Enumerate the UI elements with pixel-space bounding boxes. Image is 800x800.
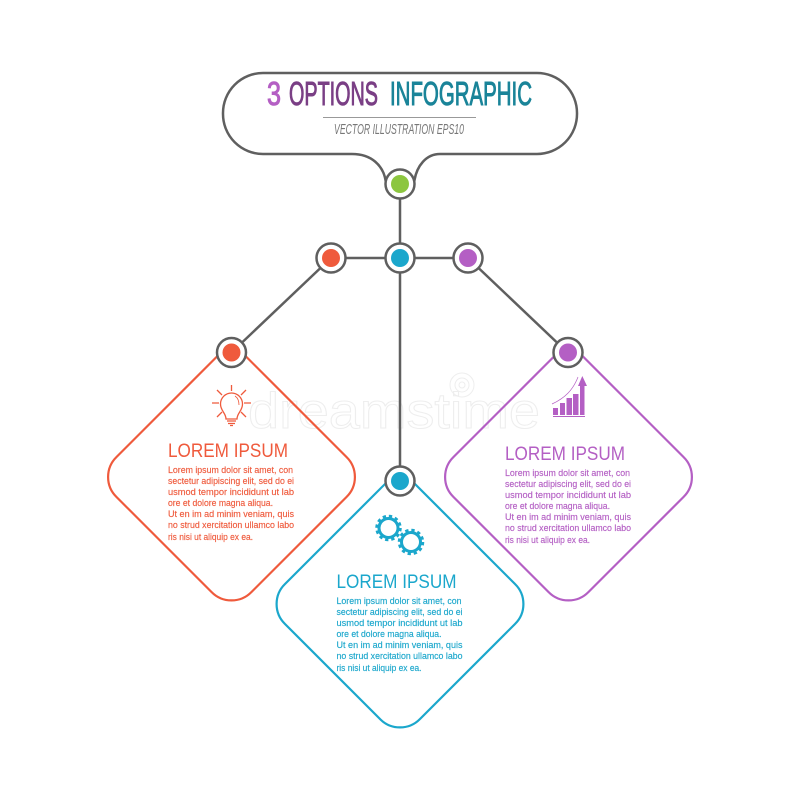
icon: light bulb bbox=[212, 385, 251, 426]
text block: blue: Ut en im ad minim veniam, quis bbox=[336, 639, 463, 650]
text block: blue: ris nisi ut aliquip ex ea. bbox=[336, 662, 422, 673]
node: purple panel bbox=[554, 338, 582, 367]
text block: red: ore et dolore magna aliqua. bbox=[168, 497, 273, 508]
icon: gears bbox=[377, 516, 422, 554]
title: OPTIONS bbox=[289, 75, 378, 112]
heading: red: LOREM IPSUM bbox=[168, 441, 288, 462]
text block: blue: Lorem ipsum dolor sit amet, con bbox=[336, 595, 462, 606]
subtitle: VECTOR ILLUSTRATION EPS10 bbox=[334, 121, 464, 138]
heading: blue: LOREM IPSUM bbox=[336, 572, 456, 593]
text block: purple: ore et dolore magna aliqua. bbox=[505, 500, 610, 511]
node: red panel bbox=[217, 338, 246, 367]
icon: growth chart bbox=[552, 376, 587, 417]
node: red hub bbox=[316, 244, 346, 272]
text block: purple: Ut en im ad minim veniam, quis bbox=[505, 511, 631, 522]
text block: purple: usmod tempor incididunt ut lab bbox=[505, 489, 631, 500]
text block: red: usmod tempor incididunt ut lab bbox=[168, 486, 294, 497]
heading: purple: LOREM IPSUM bbox=[505, 444, 625, 465]
text block: red: ris nisi ut aliquip ex ea. bbox=[168, 531, 253, 542]
connector lines bbox=[231, 190, 568, 475]
text block: purple: sectetur adipiscing elit, sed do ei bbox=[505, 478, 631, 489]
text block: red: Lorem ipsum dolor sit amet, con bbox=[168, 464, 293, 475]
panel: purple diamond bbox=[445, 342, 692, 600]
panel: blue diamond bbox=[277, 469, 523, 727]
watermark: dreamstime bbox=[248, 383, 540, 439]
text block: blue bbox=[336, 595, 463, 673]
title bbox=[267, 75, 532, 112]
text block: blue: no strud xercitation ullamco labo bbox=[336, 650, 462, 661]
panel: red diamond bbox=[108, 342, 355, 600]
text block: red: no strud xercitation ullamco labo bbox=[168, 519, 294, 530]
node: blue panel bbox=[386, 466, 414, 496]
text block: blue: sectetur adipiscing elit, sed do ei bbox=[336, 606, 462, 617]
text block: red: sectetur adipiscing elit, sed do ei bbox=[168, 475, 294, 486]
text block: red bbox=[168, 464, 294, 542]
text block: blue: ore et dolore magna aliqua. bbox=[336, 628, 442, 639]
title bubble bbox=[223, 73, 577, 180]
node: purple hub bbox=[454, 244, 482, 272]
title: 3 bbox=[267, 75, 281, 112]
text block: blue: usmod tempor incididunt ut lab bbox=[336, 617, 462, 628]
node: green bbox=[386, 170, 414, 198]
node: blue hub bbox=[386, 244, 414, 272]
title: INFOGRAPHIC bbox=[390, 75, 532, 112]
text block: purple: ris nisi ut aliquip ex ea. bbox=[505, 534, 590, 545]
text block: purple bbox=[505, 467, 631, 545]
text block: red: Ut en im ad minim veniam, quis bbox=[168, 508, 294, 519]
text block: purple: no strud xercitation ullamco labo bbox=[505, 522, 631, 533]
text block: purple: Lorem ipsum dolor sit amet, con bbox=[505, 467, 630, 478]
